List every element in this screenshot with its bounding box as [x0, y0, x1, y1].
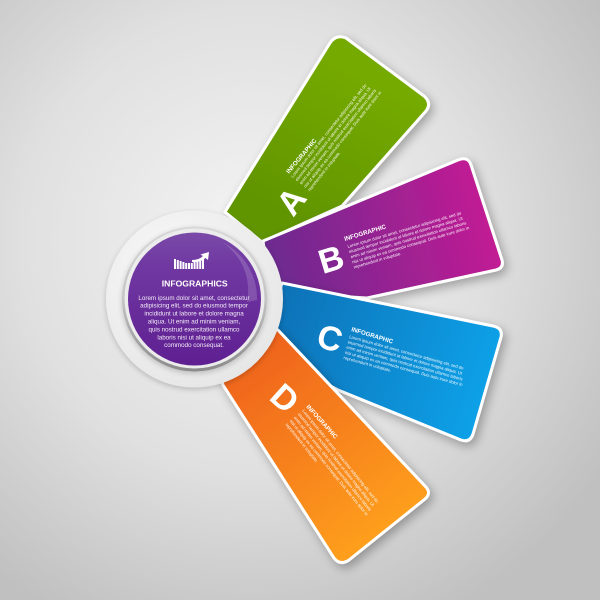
text A: nisi ut aliquip ex ea commodo consequat. Duis aute irure dolor in [303, 90, 383, 189]
panel: central badge [106, 210, 283, 388]
body text [138, 295, 250, 349]
letter C: C [313, 317, 347, 360]
letter D: D [262, 376, 306, 421]
text B: enim ad minim veniam, quis nostrud exercitation ullamco laboris [350, 220, 467, 259]
text C: Lorem ipsum dolor sit amet, consectetur adipisicing elit, sed do [349, 334, 465, 371]
heading C: INFOGRAPHIC [350, 326, 394, 346]
text A: reprehenderit in voluptate. [307, 150, 341, 192]
text D: Lorem ipsum dolor sit amet, consectetur adipisicing elit, sed do [301, 408, 380, 504]
text C: eiusmod tempor incididunt ut labore et dolore magna aliqua. Ut [347, 339, 463, 376]
body text: commodo consequat. [164, 342, 224, 349]
text D: nisi ut aliquip ex ea commodo consequat. Duis aute irure dolor in [289, 419, 370, 517]
text A: Lorem ipsum dolor sit amet, consectetur adipisicing elit, sed do [290, 82, 368, 179]
text B: eiusmod tempor incididunt ut labore et dolore magna aliqua. Ut [348, 215, 464, 254]
text B: nisi ut aliquip ex ea commodo consequat. Duis aute irure dolor in [351, 225, 470, 264]
heading B: INFOGRAPHIC [344, 223, 388, 243]
text C: nisi ut aliquip ex ea commodo consequat. Duis aute irure dolor in [344, 350, 464, 387]
text C [343, 334, 468, 393]
gloss [222, 242, 257, 302]
letter B: B [314, 238, 349, 282]
body text: incididunt ut labore et dolore magna [144, 311, 244, 318]
white ring [106, 210, 283, 388]
panel: card A [225, 37, 429, 242]
metal ring [122, 226, 267, 372]
heading A: INFOGRAPHIC [285, 137, 319, 175]
text C: reprehenderit in voluptate. [343, 355, 392, 373]
text D: reprehenderit in voluptate. [284, 422, 319, 464]
body text: laboris nisi ut aliquip ex ea [157, 334, 231, 341]
text C: enim ad minim veniam, quis nostrud exercitation ullamco laboris [346, 345, 463, 382]
text B: reprehenderit in voluptate. [353, 251, 402, 270]
text A: eiusmod tempor incididunt ut labore et dolore magna aliqua. Ut [294, 86, 372, 182]
icon: rising bars and arrow [174, 252, 209, 269]
panel: card B [263, 159, 502, 298]
panel: card D [200, 320, 428, 563]
heading: infographics: INFOGRAPHICS [162, 278, 228, 288]
panel: card C [262, 283, 501, 441]
body text: aliqua. Ut enim ad minim veniam, [148, 318, 240, 326]
text B [347, 209, 472, 270]
letter A: A [269, 180, 314, 223]
text B: Lorem ipsum dolor sit amet, consectetur adipisicing elit, sed do [347, 210, 462, 249]
heading D: INFOGRAPHIC [305, 404, 339, 441]
body text: adipisicing elit, sed do eiusmod tempor [140, 303, 248, 310]
purple disc [128, 232, 261, 366]
body text: Lorem ipsum dolor sit amet, consectetur [138, 295, 250, 302]
body text: quis nostrud exercitation ullamco [148, 326, 240, 333]
text D: enim ad minim veniam, quis nostrud exercitation ullamco laboris [293, 415, 373, 512]
text A: enim ad minim veniam, quis nostrud exercitation ullamco laboris [298, 88, 377, 185]
text D: eiusmod tempor incididunt ut labore et dolore magna aliqua. Ut [297, 412, 376, 508]
